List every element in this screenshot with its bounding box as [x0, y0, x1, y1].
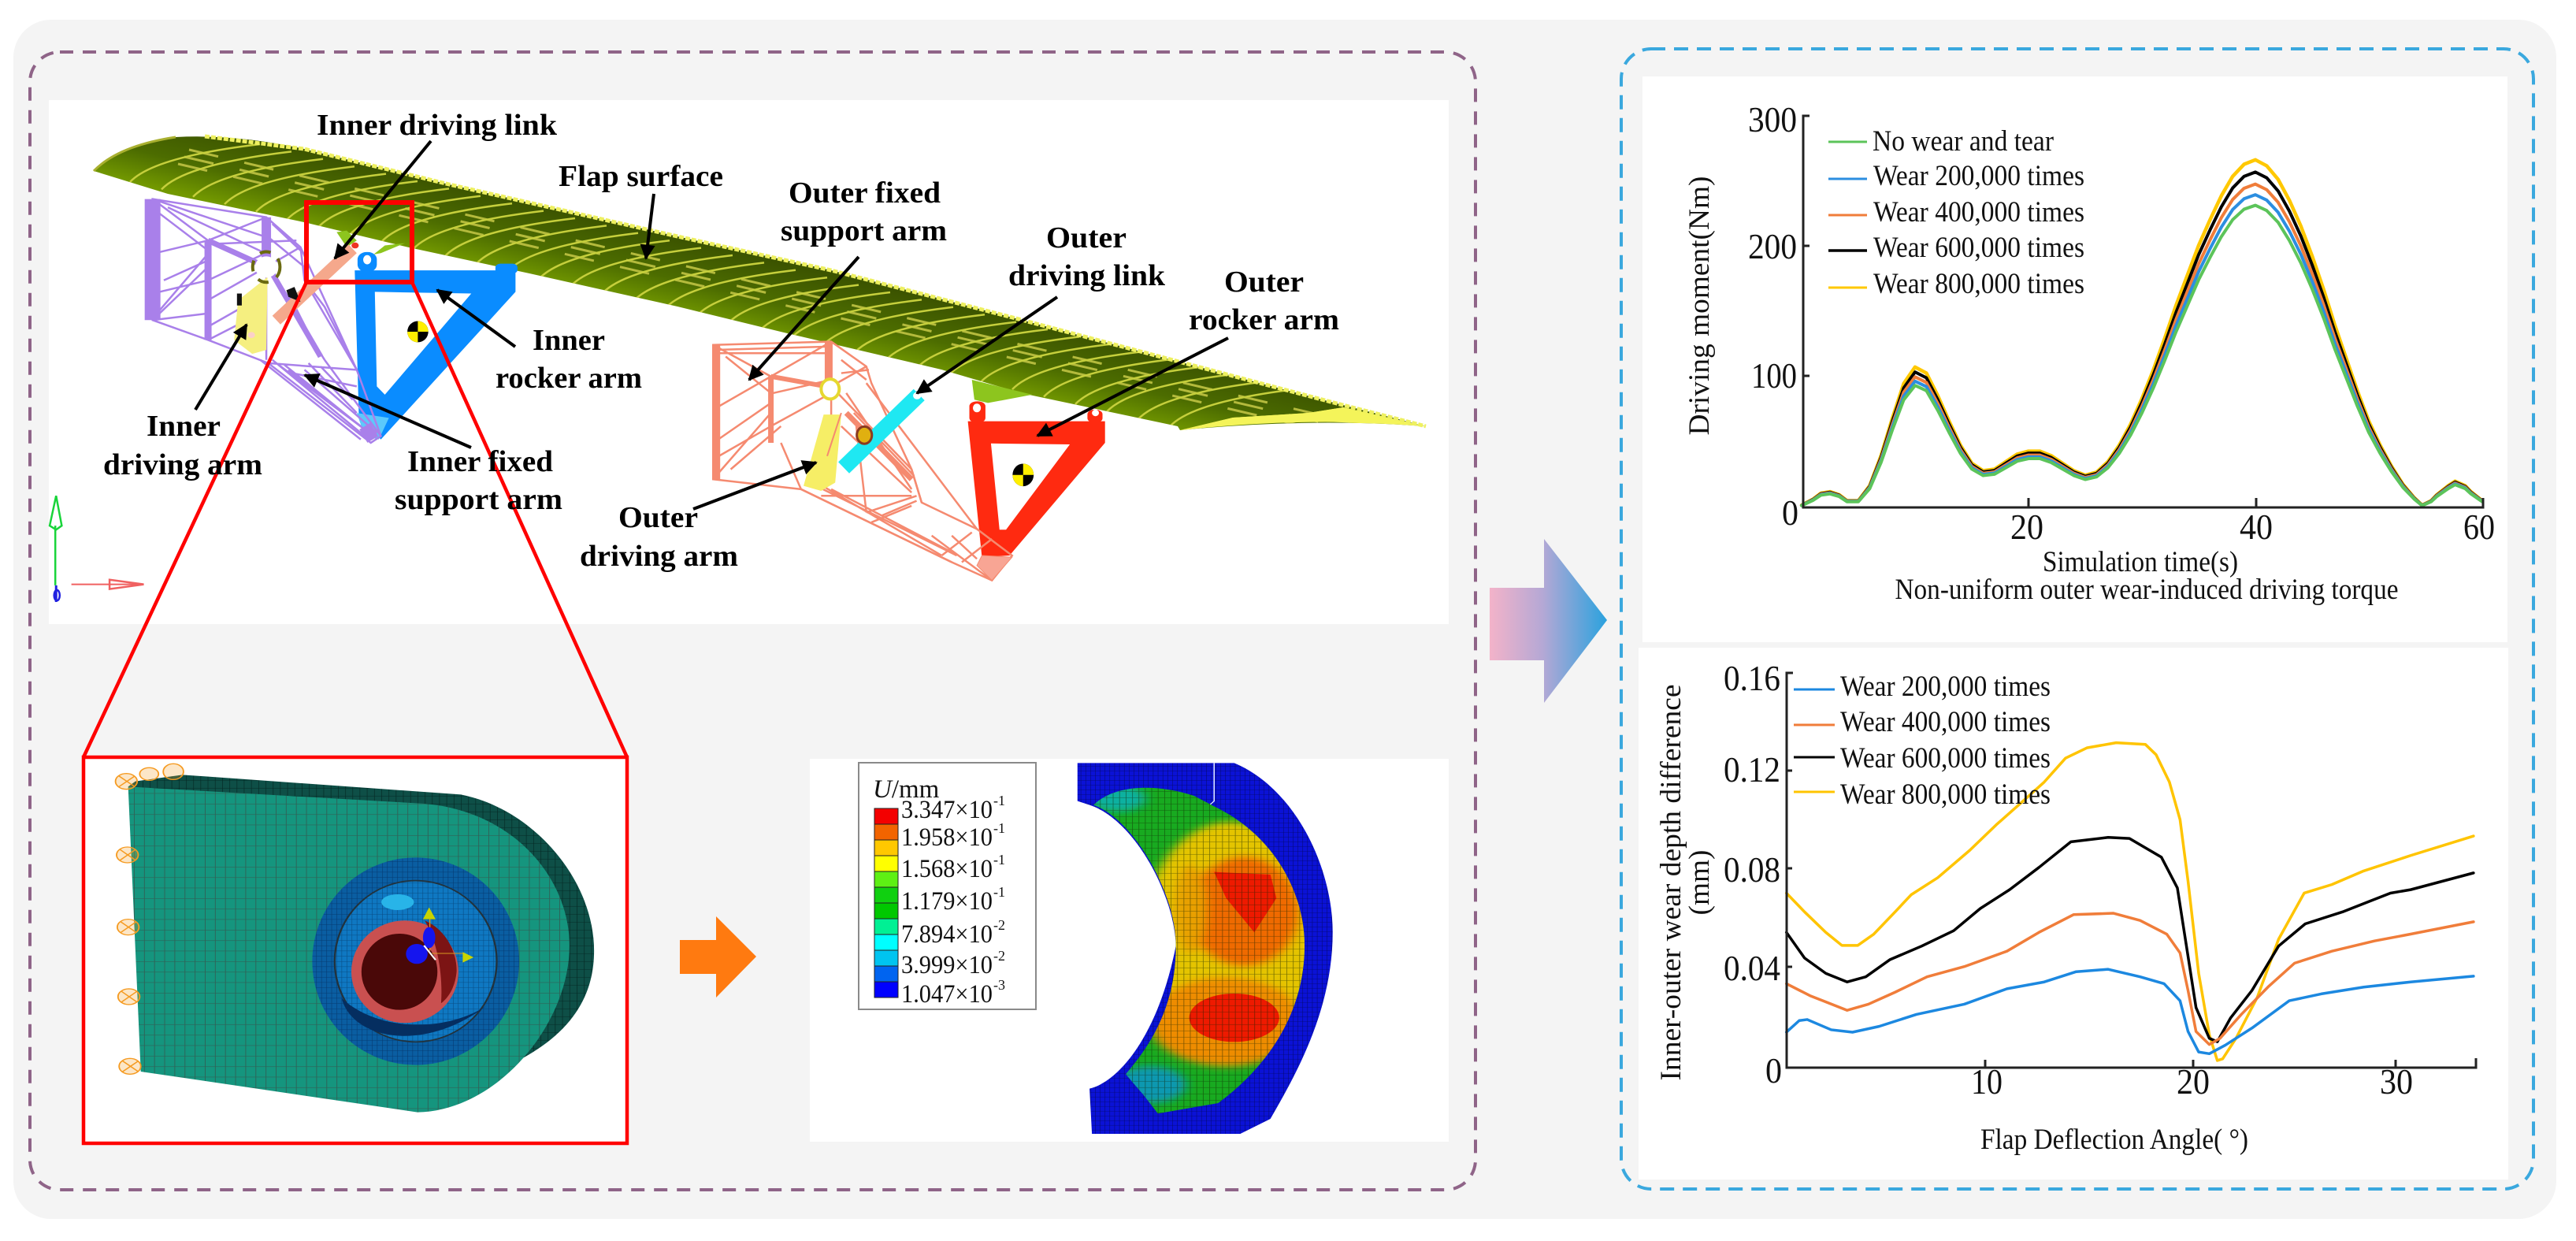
panel border: left dashed frame — [30, 52, 1475, 1190]
inner fixed support arm frame — [153, 199, 380, 443]
icon: load arrows — [406, 908, 473, 964]
chart legend: Wear 600,000 times — [1873, 232, 2084, 264]
part labels: Inner — [533, 324, 605, 357]
x axis numbers — [2010, 507, 2495, 547]
part labels: rocker arm — [1189, 303, 1339, 336]
x axis title: Flap Deflection Angle( °) — [1980, 1124, 2248, 1156]
part labels: driving arm — [580, 540, 738, 573]
legend values: 1.958×10 — [901, 823, 993, 852]
chart legend: No wear and tear — [1873, 125, 2054, 158]
part labels: driving link — [1008, 259, 1166, 292]
y axis title — [1655, 684, 1716, 1081]
part labels: rocker arm — [496, 362, 642, 395]
panel: driving moment chart — [1642, 76, 2507, 642]
outer driving arm and link — [804, 379, 921, 491]
part labels: driving arm — [103, 448, 262, 481]
chart legend: Wear 200,000 times — [1840, 671, 2051, 703]
contour shell result — [1078, 763, 1333, 1134]
arrows: part leader arrows — [195, 141, 1228, 509]
x axis numbers: 20 — [2010, 507, 2043, 547]
bearing inner race — [335, 881, 497, 1042]
legend values: 3.347×10 — [901, 796, 993, 824]
y axis numbers: 0.08 — [1724, 849, 1780, 890]
chart caption: Non-uniform outer wear-induced driving torque — [1895, 574, 2398, 606]
legend values — [901, 793, 1005, 1009]
legend title: U/mm — [873, 775, 940, 804]
part labels: Inner driving link — [317, 109, 558, 142]
part labels: Inner fixed — [407, 445, 553, 478]
legend values: -2 — [993, 948, 1005, 964]
marker: centre of gravity — [407, 321, 429, 342]
axes — [1803, 116, 2483, 507]
y axis numbers: 0.12 — [1724, 749, 1780, 790]
icon: fixed constraints — [116, 764, 184, 1074]
callout: zoom selection box — [306, 202, 412, 282]
panel border: right dashed frame — [1621, 49, 2533, 1189]
legend values: 1.568×10 — [901, 855, 993, 883]
y axis numbers: 200 — [1748, 226, 1797, 266]
outer fixed support arm frame — [713, 342, 1012, 581]
y axis numbers: 0.04 — [1724, 948, 1780, 988]
legend values: -1 — [993, 820, 1005, 836]
arrow: model to results — [1490, 539, 1607, 703]
panel: wear depth difference chart — [1639, 648, 2508, 1180]
inner rocker arm — [336, 231, 518, 440]
legend values: -2 — [993, 917, 1005, 933]
y axis title: (mm) — [1683, 849, 1716, 916]
curves: wear depth series — [1787, 743, 2474, 1061]
part labels: Outer fixed — [789, 176, 941, 210]
legend values: 3.999×10 — [901, 951, 993, 979]
part labels: support arm — [781, 214, 947, 247]
x axis numbers: 30 — [2380, 1061, 2413, 1102]
icon: coordinate axis triad — [50, 496, 143, 602]
chart legend — [1794, 671, 2051, 811]
x axis numbers: 60 — [2463, 507, 2495, 547]
y axis numbers — [1748, 99, 1798, 533]
x axis numbers: 40 — [2240, 507, 2273, 547]
outer rocker arm — [968, 380, 1105, 557]
legend values: -1 — [993, 852, 1005, 868]
axes — [1787, 673, 2476, 1068]
chart legend: Wear 400,000 times — [1840, 706, 2051, 738]
legend values: -1 — [993, 884, 1005, 900]
part labels: Inner — [147, 410, 221, 443]
chart legend: Wear 200,000 times — [1873, 160, 2084, 192]
chart legend: Wear 800,000 times — [1873, 268, 2084, 300]
inner driving arm and link — [234, 243, 358, 354]
x axis title: Simulation time(s) — [2043, 546, 2238, 578]
y axis title: Driving moment(Nm) — [1683, 176, 1716, 436]
legend values: -3 — [993, 977, 1005, 993]
part labels: Outer — [1224, 266, 1304, 299]
part labels: support arm — [395, 483, 562, 516]
chart legend: Wear 400,000 times — [1873, 196, 2084, 229]
panel: zoomed finite element mesh — [810, 759, 1449, 1142]
legend values: 1.047×10 — [901, 980, 993, 1009]
part labels: Flap surface — [559, 160, 723, 193]
y axis numbers: 300 — [1748, 99, 1797, 139]
y axis title: Inner-outer wear depth difference — [1655, 685, 1687, 1080]
x axis numbers — [1971, 1061, 2413, 1102]
chart legend: Wear 600,000 times — [1840, 742, 2051, 775]
bracket mesh model — [116, 764, 594, 1113]
x axis numbers: 20 — [2177, 1061, 2210, 1102]
y axis numbers: 0 — [1782, 492, 1798, 533]
zoom connector lines — [84, 282, 627, 757]
legend values: -1 — [993, 793, 1005, 808]
y axis numbers: 0.16 — [1724, 658, 1780, 698]
chart legend — [1828, 125, 2084, 300]
panel: flap mechanism model image — [49, 100, 1449, 624]
legend values: 1.179×10 — [901, 887, 993, 916]
legend values: 7.894×10 — [901, 920, 993, 949]
part labels: Outer — [618, 501, 698, 534]
y axis numbers: 100 — [1751, 355, 1797, 396]
part labels: Outer — [1046, 221, 1127, 255]
marker: outer centre of gravity — [1012, 463, 1034, 486]
callout: zoomed detail box — [84, 757, 627, 1143]
y axis numbers — [1724, 658, 1782, 1091]
panel: results charts — [1621, 49, 2533, 1189]
legend colour bar — [874, 808, 898, 998]
curves: driving moment series — [1802, 160, 2482, 506]
contour legend — [859, 763, 1036, 1009]
arrow: mesh to contour result — [680, 916, 756, 998]
inner ring — [351, 920, 458, 1023]
chart legend: Wear 800,000 times — [1840, 778, 2051, 811]
panel: flap mechanism and finite element model — [30, 52, 1475, 1190]
part labels — [103, 109, 1339, 573]
x axis numbers: 10 — [1971, 1061, 2003, 1102]
y axis numbers: 0 — [1765, 1050, 1782, 1091]
flap surface — [94, 136, 1426, 449]
bearing outer ring — [312, 857, 519, 1065]
